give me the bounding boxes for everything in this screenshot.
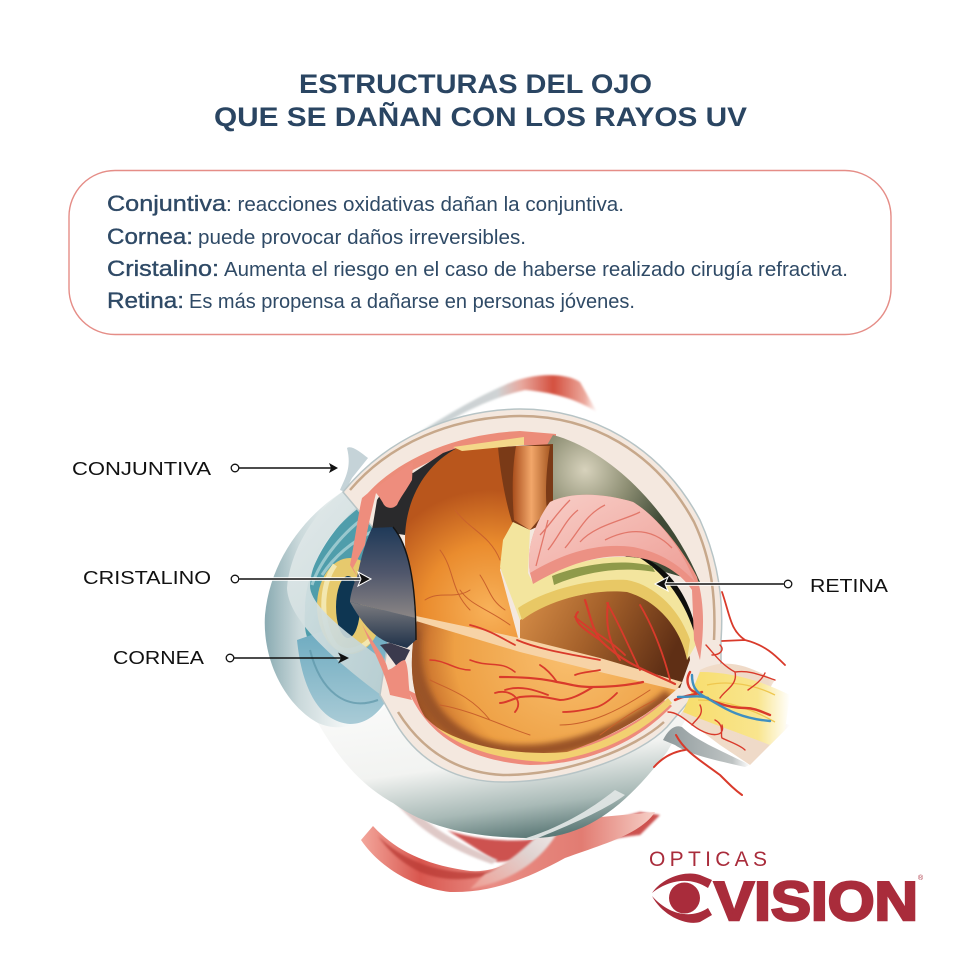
dark cavity under flap bbox=[520, 590, 690, 688]
text: conjuntiva: : reacciones oxidativas dañan la conjuntiva. bbox=[226, 193, 624, 216]
pink ciliary body bbox=[350, 462, 413, 578]
optic disc vessels bbox=[675, 672, 770, 715]
cornea section band bbox=[287, 490, 396, 698]
text: cristalino: Cristalino: bbox=[107, 256, 219, 281]
green choroid patch bbox=[545, 435, 700, 582]
text: retina: Retina: bbox=[107, 288, 184, 313]
eye illustration bbox=[265, 375, 790, 892]
black strip behind flap bbox=[630, 555, 698, 640]
arrow: retina bbox=[655, 577, 792, 591]
logo: Opticas Vision: ® bbox=[918, 874, 924, 882]
pupil bbox=[336, 576, 360, 638]
title: QUE SE DAÑAN CON LOS RAYOS UV bbox=[214, 101, 747, 132]
logo: Opticas Vision bbox=[649, 848, 924, 932]
crystalline lens bbox=[350, 527, 416, 700]
iris golden ring bbox=[317, 558, 383, 654]
top muscle and tendon bbox=[398, 375, 597, 450]
yellow wedge at top of chamber bbox=[453, 437, 524, 451]
upper chamber bbox=[405, 445, 532, 645]
text: retina: Es más propensa a dañarse en personas jóvenes. bbox=[189, 290, 635, 313]
text: conjuntiva: Conjuntiva bbox=[107, 191, 227, 216]
label: cornea: CORNEA bbox=[113, 647, 205, 668]
panel: list of affected structures bbox=[69, 170, 891, 334]
peach column bbox=[513, 446, 550, 530]
optic nerve bbox=[663, 664, 790, 767]
section ring outer bbox=[343, 409, 722, 782]
dark ciliary strip bbox=[372, 448, 457, 535]
icon: logo eye bbox=[652, 874, 712, 923]
tan layer line bbox=[350, 416, 714, 775]
logo: Opticas Vision: OPTICAS bbox=[649, 848, 767, 871]
bottom muscles bbox=[361, 798, 660, 892]
lower chamber rim shading bbox=[413, 630, 670, 751]
iris bbox=[297, 495, 395, 724]
tendon: lower crossing bbox=[470, 820, 556, 889]
lower chamber bbox=[412, 620, 680, 755]
outer arteries bbox=[722, 592, 785, 665]
nerve sheath bbox=[663, 726, 750, 767]
lower coral layer bbox=[408, 690, 672, 765]
top coral layer bbox=[368, 431, 556, 493]
title: ESTRUCTURAS DEL OJO bbox=[299, 69, 652, 99]
text: cornea: Cornea: bbox=[107, 224, 193, 249]
arrow: cornea bbox=[226, 652, 349, 664]
text: cristalino: Aumenta el riesgo en el caso de haberse realizado cirugía refractiva. bbox=[224, 258, 848, 281]
arrow: conjuntiva bbox=[231, 463, 338, 473]
globe lower surface bbox=[318, 640, 690, 838]
pale cut ridge bbox=[416, 616, 682, 690]
iris lower bbox=[297, 625, 395, 724]
yellow sclera flap bbox=[500, 522, 697, 660]
label: cristalino: CRISTALINO bbox=[83, 567, 211, 588]
text: cornea: puede provocar daños irreversibles. bbox=[198, 226, 526, 249]
title bbox=[214, 69, 747, 132]
olive strip bbox=[552, 563, 655, 585]
blood vessels bbox=[425, 510, 785, 795]
arrow: cristalino bbox=[231, 572, 371, 586]
cornea outer bbox=[265, 490, 400, 727]
label: retina: RETINA bbox=[810, 575, 889, 596]
tendon: lower diagonal bbox=[392, 798, 498, 864]
retinal vessels in cavity bbox=[575, 603, 670, 680]
pink retina flap bbox=[529, 495, 703, 660]
wordmark: VISION bbox=[714, 870, 918, 932]
lens lower tissue bbox=[380, 643, 410, 668]
conjunctiva fold bbox=[340, 447, 368, 492]
brown column bbox=[498, 444, 553, 530]
label: conjuntiva: CONJUNTIVA bbox=[72, 458, 212, 479]
lower pink ciliary body bbox=[362, 624, 412, 700]
yellow band bbox=[436, 698, 672, 762]
